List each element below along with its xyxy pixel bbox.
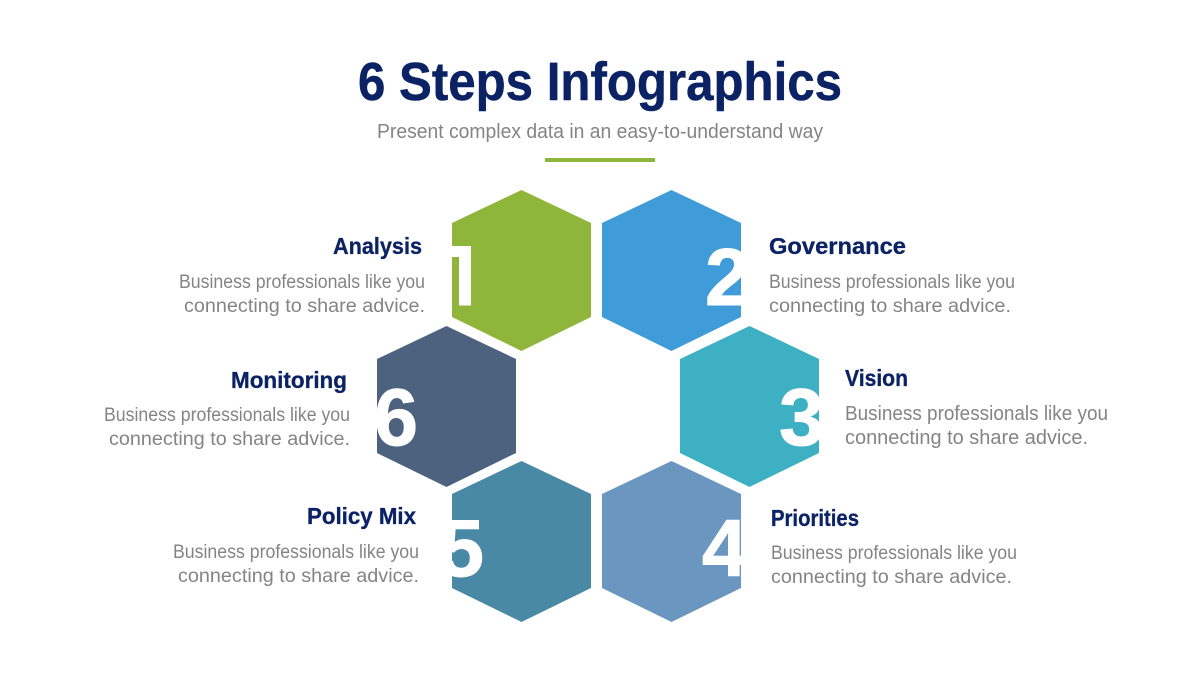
- hexagon 1: [441, 190, 591, 351]
- step text: Priorities: [771, 505, 1017, 588]
- hexagon 5: [439, 461, 591, 622]
- hexagon 5: 5: [439, 504, 484, 594]
- hexagon 4: 4: [702, 504, 747, 594]
- step text: Policy Mix: Policy Mix: [307, 503, 416, 529]
- step text: Analysis: [179, 233, 425, 317]
- step text: Monitoring: Monitoring: [231, 367, 347, 393]
- step text: Priorities: Priorities: [771, 505, 859, 531]
- hexagon 3: 3: [779, 373, 824, 463]
- step text: Governance: connecting to share advice.: [769, 296, 1011, 317]
- step text: Governance: Business professionals like you: [769, 272, 1015, 293]
- step text: Policy Mix: [173, 503, 419, 587]
- step text: Vision: [845, 365, 1108, 449]
- step text: Analysis: connecting to share advice.: [184, 296, 425, 317]
- step text: Policy Mix: Business professionals like you: [173, 542, 419, 563]
- step text: Vision: Business professionals like you: [845, 403, 1108, 425]
- step text: Governance: Governance: [769, 233, 906, 259]
- hexagon 2: 2: [705, 233, 750, 323]
- step text: Monitoring: Business professionals like you: [104, 405, 350, 426]
- step text: Policy Mix: connecting to share advice.: [178, 566, 419, 587]
- step text: Analysis: Analysis: [333, 233, 422, 259]
- step text: Vision: Vision: [845, 365, 908, 391]
- subtitle: Present complex data in an easy-to-understand way: [377, 121, 823, 143]
- step text: Vision: connecting to share advice.: [845, 427, 1088, 449]
- step text: Priorities: connecting to share advice.: [771, 567, 1012, 588]
- accent bar: [545, 158, 655, 162]
- hexagon 2: [602, 190, 750, 351]
- hexagon 3: [680, 326, 824, 487]
- title: 6 Steps Infographics: [358, 52, 842, 112]
- hexagon 6: 6: [374, 373, 418, 463]
- hexagon 4: [602, 461, 747, 622]
- step text: Monitoring: [104, 367, 350, 450]
- step text: Governance: [769, 233, 1015, 317]
- step text: Priorities: Business professionals like you: [771, 543, 1017, 564]
- hexagon 1: 1: [441, 233, 486, 323]
- hexagon 6: [374, 326, 516, 487]
- step text: Analysis: Business professionals like you: [179, 272, 425, 293]
- step text: Monitoring: connecting to share advice.: [109, 429, 350, 450]
